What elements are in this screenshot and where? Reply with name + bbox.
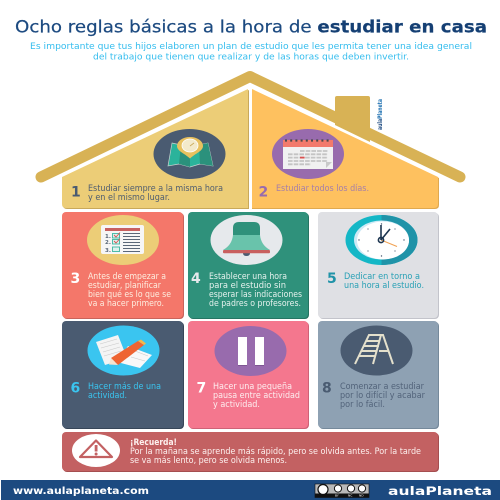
house roof	[41, 76, 460, 177]
icon: checklist: 1.	[105, 234, 111, 240]
footer bar	[1, 480, 500, 500]
intro text: del trabajo que tienen que realizar y de las horas que deben invertir.	[93, 52, 409, 62]
rule 1 text: Estudiar siempre a la misma hora	[88, 183, 223, 193]
rule 2 number: 2	[258, 184, 268, 200]
rule 1 text	[88, 183, 223, 202]
footer logo: aulaPlaneta	[388, 484, 492, 498]
rule 5 text: Dedicar en torno a	[344, 271, 420, 281]
rule 8 number: 8	[322, 380, 332, 396]
rule 1 number: 1	[71, 184, 81, 200]
icon: warning triangle	[72, 434, 120, 467]
rule 3 text: Antes de empezar a	[88, 271, 166, 281]
rule 2 text: Estudiar todos los días.	[276, 183, 369, 193]
rule 8 text	[340, 381, 426, 409]
icon: map with pin	[154, 129, 226, 179]
icon: bell	[210, 215, 282, 265]
rule 4 text: Establecer una hora	[209, 271, 287, 281]
callout text: ¡Recuerda!	[130, 437, 177, 447]
intro text	[30, 41, 472, 62]
panel: rule 8	[318, 321, 439, 429]
icon: checklist: 3.	[105, 248, 111, 254]
rule 8 text: por lo difícil y acabar	[340, 390, 426, 400]
creative commons badge	[315, 484, 369, 498]
creative commons badge: NC	[348, 494, 352, 498]
rule 7 text	[213, 381, 300, 409]
rule 4 text: esperar las indicaciones	[209, 289, 302, 299]
rule 5 text: una hora al estudio.	[344, 280, 424, 290]
panel: rule 2	[252, 89, 439, 209]
panel: rule 7	[188, 321, 309, 429]
icon: papers and pencil	[88, 326, 160, 376]
rule 7 text: pausa entre actividad	[213, 390, 300, 400]
icon: checklist	[87, 215, 159, 265]
rule 3 text: estudiar, planificar	[88, 280, 162, 290]
icon: pause	[214, 326, 286, 376]
rule 5 number: 5	[327, 271, 337, 287]
rule 4 text: para el estudio sin	[209, 280, 286, 290]
panel: rule 3	[62, 212, 184, 319]
rule 4 number: 4	[191, 271, 201, 287]
icon: ladder	[340, 326, 412, 376]
panel: rule 4	[188, 212, 309, 319]
icon: checklist: 2.	[105, 240, 111, 246]
callout text: Por la mañana se aprende más rápido, pero se olvida antes. Por la tarde	[130, 446, 421, 456]
callout: recuerda	[62, 432, 439, 472]
callout text	[130, 437, 421, 465]
intro text: Es importante que tus hijos elaboren un plan de estudio que les permita tener una idea general	[30, 41, 472, 51]
rule 7 text: y actividad.	[213, 399, 260, 409]
panel: rule 1	[62, 89, 249, 209]
rule 4 text: de padres o profesores.	[209, 298, 301, 308]
rule 3 text	[88, 271, 171, 308]
logo on chimney: aulaPlaneta	[377, 99, 384, 130]
icon: clock	[346, 215, 418, 265]
footer url: www.aulaplaneta.com	[13, 486, 149, 497]
rule 5 text	[344, 271, 424, 290]
rule 6 text: Hacer más de una	[88, 381, 161, 391]
rule 1 text: y en el mismo lugar.	[88, 192, 170, 202]
rule 6 number: 6	[70, 380, 80, 396]
callout text: se va más lento, pero se olvida menos.	[130, 455, 287, 465]
rule 3 number: 3	[70, 271, 80, 287]
rule 7 text: Hacer una pequeña	[213, 381, 292, 391]
panel: rule 6	[62, 321, 184, 429]
creative commons badge: ND	[359, 494, 364, 498]
creative commons badge: BY	[335, 494, 339, 498]
title: Ocho reglas básicas a la hora de estudiar en casa	[15, 18, 487, 36]
rule 3 text: bien qué es lo que se	[88, 289, 171, 299]
rule 8 text: Comenzar a estudiar	[340, 381, 425, 391]
rule 6 text: actividad.	[88, 390, 127, 400]
rule 4 text	[209, 271, 302, 308]
rule 7 number: 7	[196, 380, 206, 396]
icon: calendar	[272, 129, 344, 179]
rule 6 text	[88, 381, 161, 400]
rule 3 text: va a hacer primero.	[88, 298, 164, 308]
panel: rule 5	[318, 212, 439, 319]
rule 8 text: por lo fácil.	[340, 399, 385, 409]
